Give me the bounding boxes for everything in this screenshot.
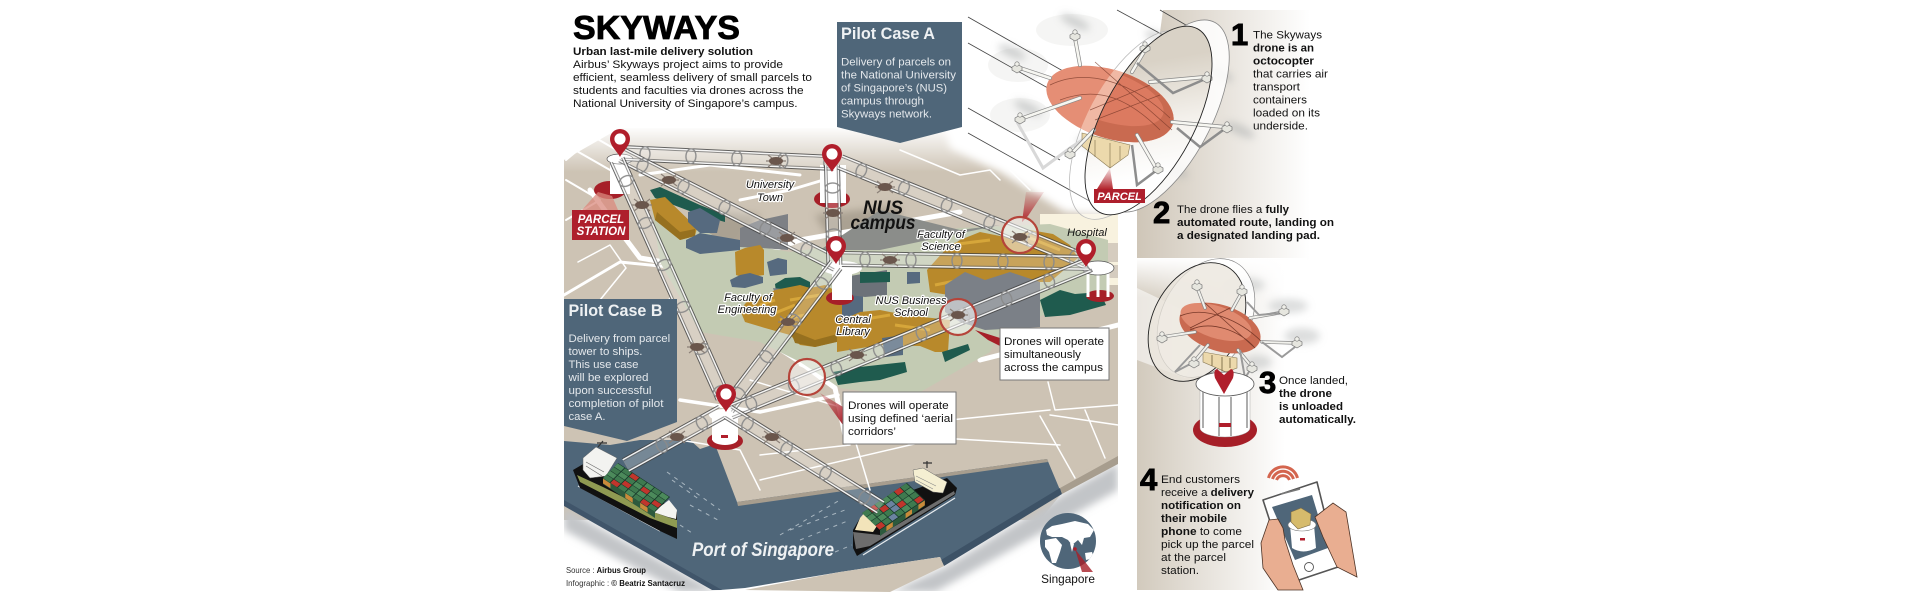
drone body back (1037, 51, 1183, 157)
panel: Pilot Case A (837, 22, 962, 143)
step 1: transport (1253, 82, 1301, 94)
intro text block: Airbus’ Skyways project aims to provide (573, 59, 783, 71)
label: parcel station: PARCEL (578, 214, 624, 226)
parcel (1203, 352, 1237, 372)
intro text block (573, 46, 812, 110)
icon: notification signal (1268, 467, 1298, 480)
body ribs (1050, 62, 1172, 130)
step 1: loaded on its (1253, 108, 1320, 120)
step 2: automated route, landing on (1177, 217, 1334, 229)
rim ring (1059, 7, 1238, 234)
step 4: phone to come (1161, 526, 1242, 538)
parcel (1082, 133, 1130, 168)
magnifier circles (789, 217, 1038, 395)
place labels: Engineering (718, 304, 777, 316)
place labels: Library (836, 326, 871, 338)
step 4: receive a delivery (1161, 487, 1255, 499)
panel: Pilot Case B: Delivery from parcel (568, 333, 670, 345)
faint inner ring (1044, 12, 1222, 238)
top fade (564, 126, 1120, 172)
rear legs (1017, 122, 1090, 168)
place labels: Central (835, 314, 871, 326)
step 1: underside. (1253, 120, 1308, 132)
place labels: School (894, 307, 928, 319)
campus ground (650, 195, 1108, 398)
panel: Pilot Case B: This use case (568, 359, 638, 371)
step 1: containers (1253, 94, 1307, 106)
place labels: NUS Business (876, 295, 947, 307)
step 1: that carries air (1253, 68, 1328, 80)
place labels: Science (921, 241, 961, 253)
water front edge left (564, 500, 722, 590)
outer corridor ring (1138, 242, 1274, 394)
parcel towers (594, 154, 1114, 450)
step 1: The Skyways (1253, 30, 1322, 42)
panel: Pilot Case B: will be explored (567, 372, 648, 384)
ground shadow beside towers (700, 205, 900, 250)
step 2 (1153, 195, 1334, 242)
panel: Pilot Case A: Pilot Case A (841, 25, 935, 43)
label: NUS campus (850, 198, 916, 234)
right hand (1315, 503, 1357, 577)
place labels: Town (757, 192, 783, 204)
callout: aerial corridors: corridors’ (848, 426, 896, 438)
land tip at bottom (745, 557, 944, 592)
label: parcel station: STATION (577, 226, 626, 238)
label: NUS campus: campus (850, 213, 916, 234)
peninsula side (737, 459, 1048, 506)
aerial corridors (610, 145, 1093, 514)
hubs (1157, 280, 1302, 373)
ship right (853, 461, 957, 556)
step 4: their mobile (1161, 513, 1227, 525)
step 4: pick up the parcel (1161, 539, 1254, 551)
place labels: University (746, 179, 796, 191)
step 1 (1231, 17, 1328, 132)
step 4: End customers (1161, 474, 1240, 486)
callout: simultaneous operation: Drones will operate (1004, 336, 1104, 348)
step 3: 3 (1259, 365, 1276, 400)
label: NUS campus: NUS (863, 198, 903, 219)
ship left (573, 441, 677, 539)
inner corridor ring (1129, 246, 1265, 398)
place labels: Hospital (1067, 227, 1107, 239)
panel: Pilot Case B: Pilot Case B (568, 302, 663, 320)
panel: Pilot Case B: upon successful (568, 385, 652, 397)
intro text block: Urban last-mile delivery solution (573, 46, 753, 58)
step 3: is unloaded (1279, 401, 1343, 413)
step 4 (1140, 462, 1255, 577)
drone arms (1020, 38, 1225, 168)
parcel tag: PARCEL (1097, 191, 1142, 203)
mini parcel tower on screen (1288, 508, 1316, 552)
step 3: automatically. (1279, 414, 1356, 426)
panel: right column background (1137, 10, 1320, 590)
map shadows (564, 463, 1118, 592)
ring interior (1059, 7, 1238, 234)
callout: simultaneous operation: across the campus (1004, 362, 1103, 374)
callout: aerial corridors: using defined ‘aerial (848, 413, 953, 425)
drone body ghost zone (1081, 70, 1168, 142)
cream glow behind hospital (1040, 214, 1118, 285)
water: Port of Singapore (564, 440, 1060, 590)
roads (564, 130, 1118, 490)
illustration: drone landed on parcel tower (1129, 242, 1320, 447)
callout beams (820, 192, 1044, 425)
callout: aerial corridors: Drones will operate (848, 400, 949, 412)
panel: Pilot Case B: tower to ships. (568, 346, 642, 358)
step 2: The drone flies a fully (1177, 204, 1290, 216)
panel: Pilot Case A: campus through (841, 96, 924, 108)
step 1: drone is an (1253, 42, 1314, 54)
place labels: Faculty of (724, 292, 773, 304)
drone body front (1093, 73, 1174, 142)
step 4: station. (1161, 565, 1199, 577)
intro text block: efficient, seamless delivery of small parcels to (573, 72, 812, 84)
step 2: 2 (1153, 195, 1170, 230)
source credits: Infographic : © Beatriz Santacruz (566, 579, 685, 588)
small drones in corridors (632, 155, 900, 443)
title: SKYWAYS (573, 9, 740, 46)
panel: Pilot Case A: Skyways network. (841, 108, 932, 120)
icon: globe with Singapore marker: Singapore (1041, 572, 1095, 586)
callout: simultaneous operation (1000, 328, 1109, 380)
illustration: Skyways drone in corridor (968, 10, 1255, 220)
quay side (1060, 456, 1118, 494)
map land (564, 128, 1118, 520)
panel: Pilot Case B: completion of pilot (568, 398, 664, 410)
panel: Pilot Case A: Delivery of parcels on (841, 56, 951, 68)
rotor blurs (996, 11, 1257, 180)
step 3 (1259, 365, 1356, 426)
icon: globe with Singapore marker (1040, 513, 1096, 586)
step 1: 1 (1231, 17, 1248, 52)
step 3: Once landed, (1279, 375, 1348, 387)
panel: Pilot Case A: of Singapore’s (NUS) (841, 82, 947, 94)
source credits (566, 566, 685, 588)
left hand (1261, 519, 1303, 590)
buildings (650, 187, 1106, 385)
panel: Pilot Case B (564, 299, 677, 441)
icon: phone held in hands (1261, 482, 1357, 590)
label: parcel station (572, 192, 629, 240)
water ripples (667, 472, 852, 552)
step 4: 4 (1140, 462, 1158, 497)
rotor halos (988, 14, 1216, 132)
legs (1175, 302, 1295, 378)
step 4: at the parcel (1161, 552, 1226, 564)
place labels (718, 179, 1107, 338)
arms (1162, 287, 1297, 367)
step 1: octocopter (1253, 56, 1315, 68)
intro text block: National University of Singapore’s campus. (573, 98, 798, 110)
drone body (1173, 293, 1267, 363)
callout: simultaneous operation: simultaneously (1004, 349, 1081, 361)
step 3: the drone (1279, 388, 1332, 400)
corridor tube (1137, 288, 1215, 378)
intro text block: students and faculties via drones across the (573, 85, 804, 97)
place labels: Faculty of (917, 229, 966, 241)
source credits: Source : Airbus Group (566, 566, 646, 575)
step 2: a designated landing pad. (1177, 230, 1320, 242)
parcel tag (1094, 168, 1145, 203)
location pins (610, 129, 1096, 412)
panel: map of NUS campus and Port of Singapore (564, 110, 1125, 592)
landing tower (1193, 369, 1257, 447)
legs (1132, 63, 1230, 185)
rotor blurs (1225, 278, 1320, 369)
corridor lines (968, 10, 1198, 203)
top-right fade (940, 110, 1125, 215)
outer ring (1075, 1, 1255, 231)
panel: Pilot Case A: the National University (841, 70, 956, 82)
step 4: notification on (1161, 500, 1241, 512)
label: Port of Singapore: Port of Singapore (692, 540, 834, 561)
sand blocks by hospital (1108, 243, 1118, 278)
drones in magnifiers (948, 231, 1030, 321)
panel: Pilot Case B: case A. (568, 411, 606, 423)
water front edge right (941, 488, 1062, 566)
callout: aerial corridors (843, 392, 956, 444)
rotor hubs (1012, 30, 1232, 174)
